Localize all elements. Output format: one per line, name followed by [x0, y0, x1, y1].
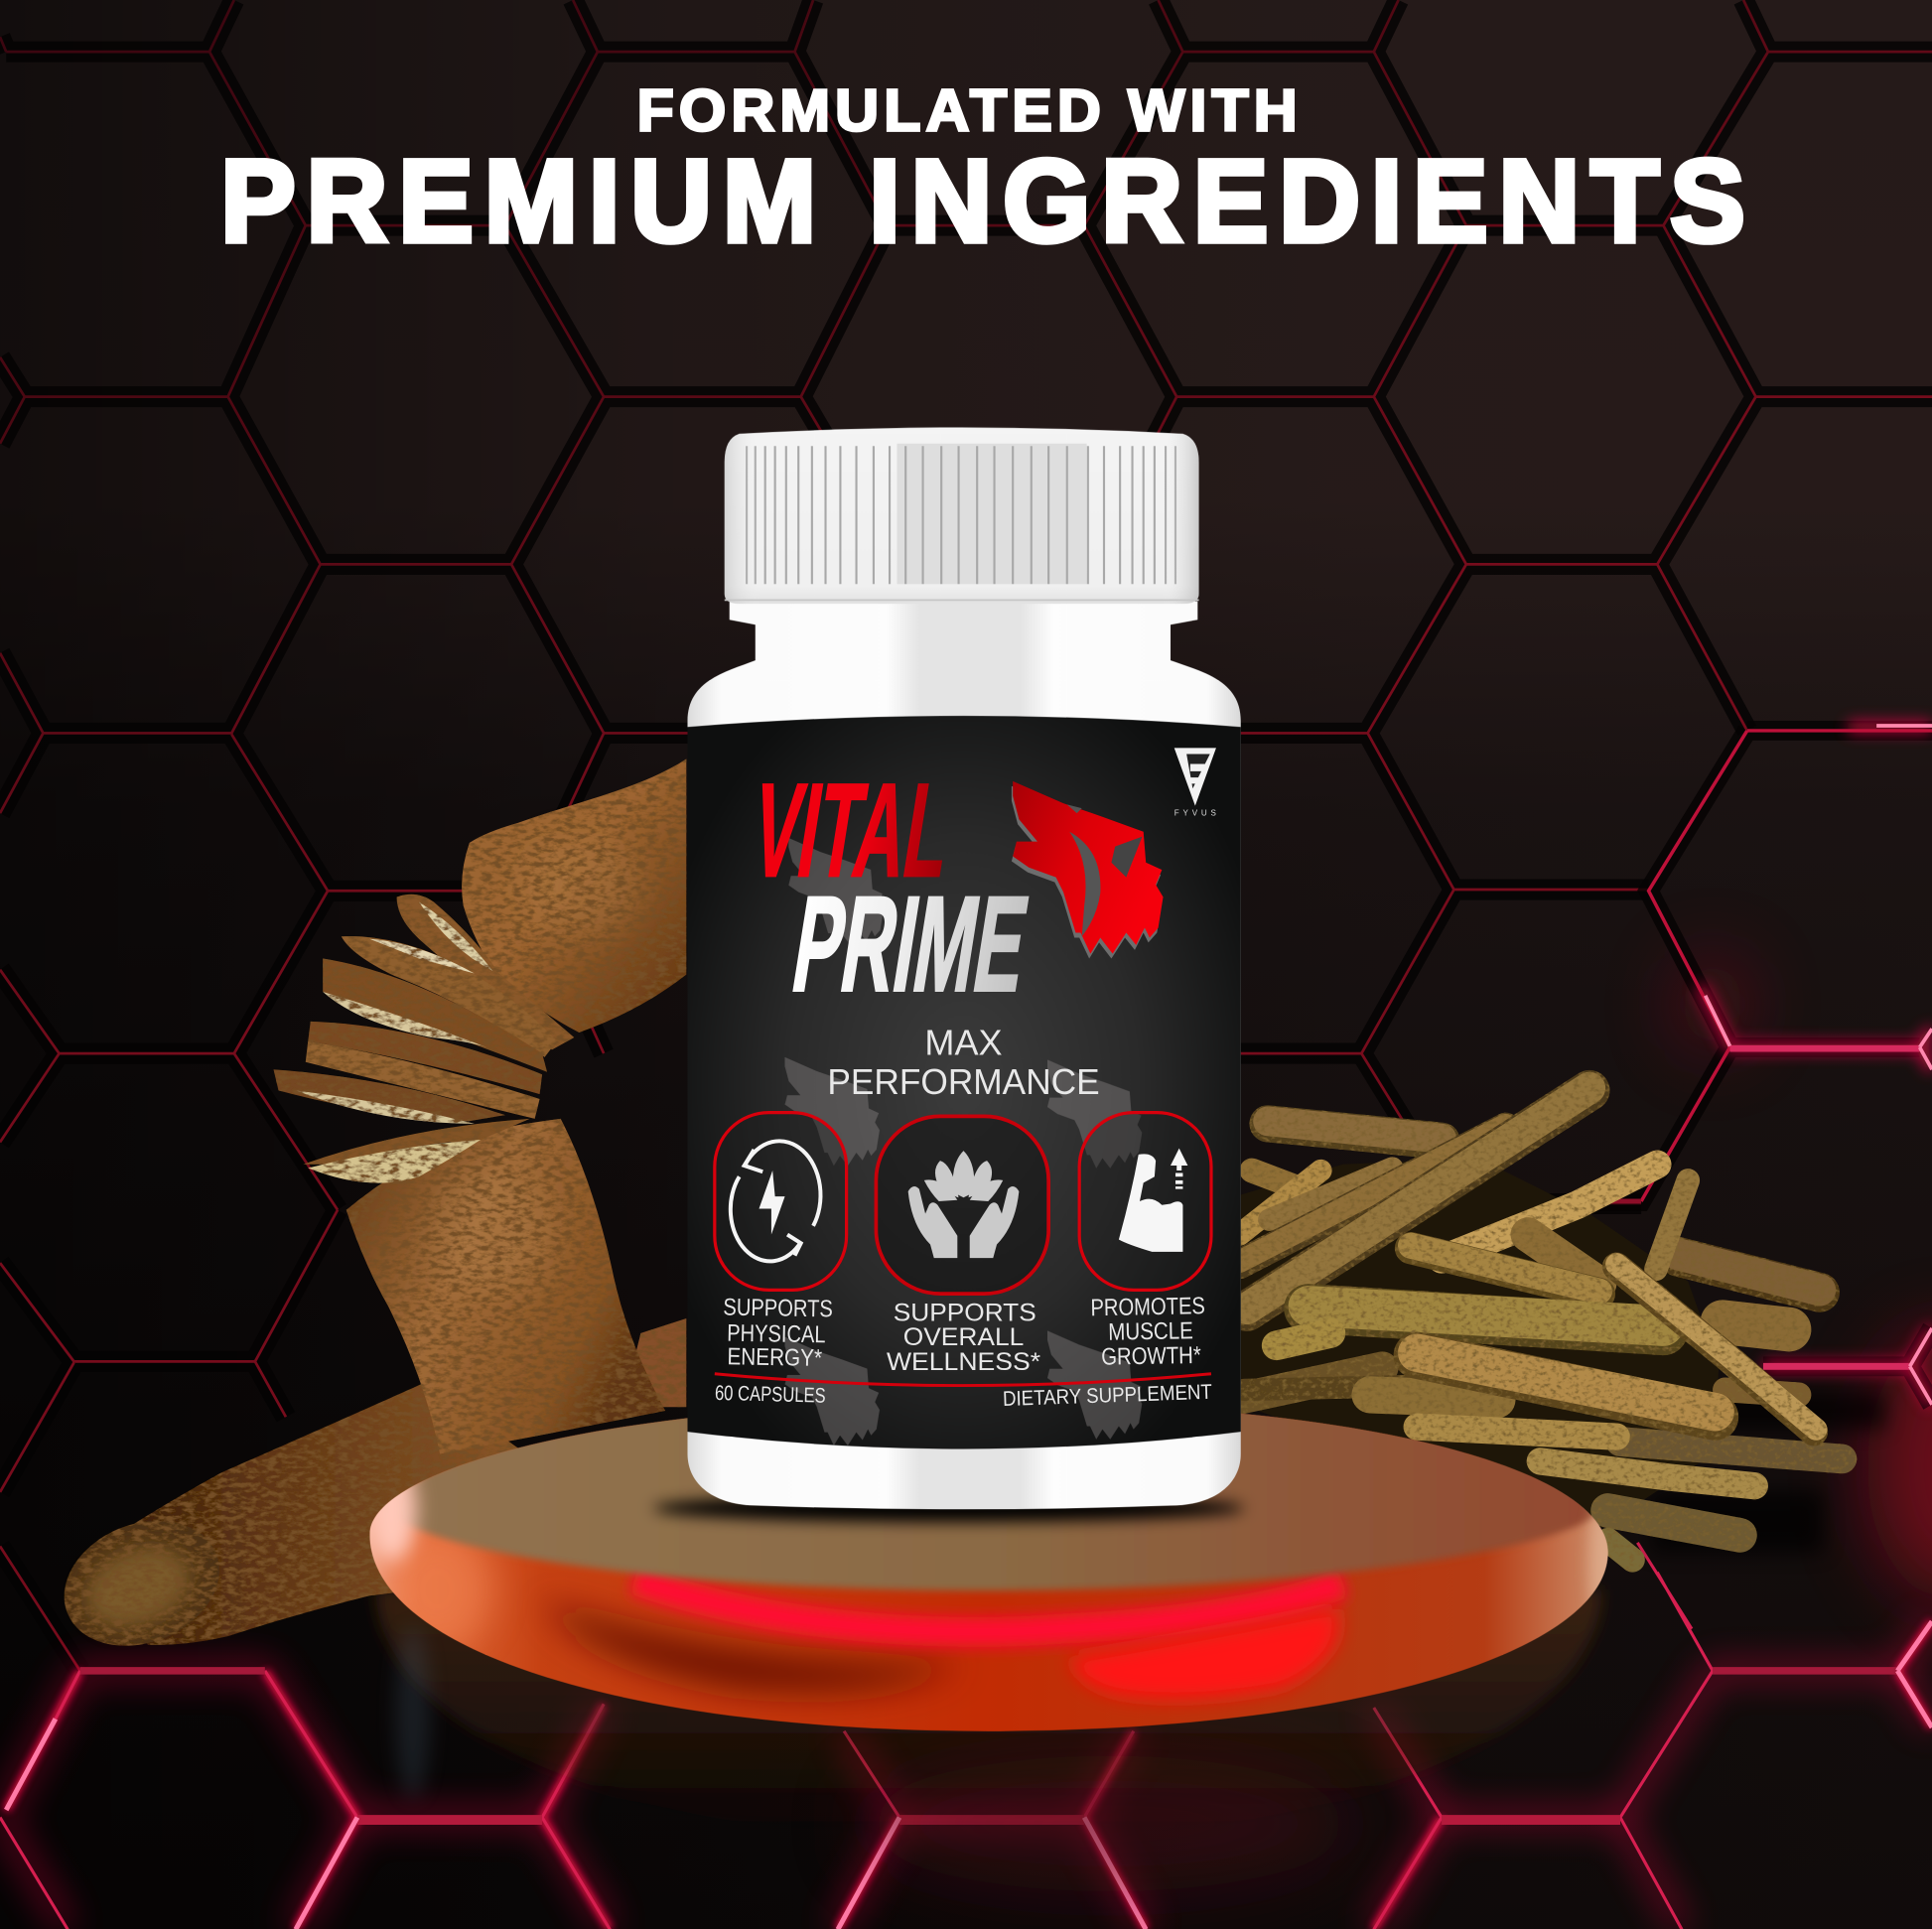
pile sticks — [1240, 1088, 1842, 1560]
ghost wolves — [785, 838, 1142, 1446]
benefit text: WELLNESS* — [887, 1349, 1040, 1376]
text: 60 capsules: 60 CAPSULES — [715, 1382, 826, 1408]
brand: VITAL: VITAL — [744, 756, 960, 904]
podium side — [369, 1402, 1608, 1731]
benefit text: GROWTH* — [1101, 1342, 1201, 1371]
benefit text: SUPPORTS — [894, 1300, 1036, 1326]
text: dietary supplement: DIETARY SUPPLEMENT — [1003, 1381, 1212, 1411]
icon: lotus and hands — [908, 1151, 1019, 1258]
icon: red wolf — [1012, 781, 1164, 959]
long root lying down — [46, 1318, 686, 1668]
icon: energy cycle — [731, 1141, 820, 1261]
front sticks — [1277, 1264, 1816, 1437]
floor reflection of podium — [376, 1589, 1601, 1891]
back sticks — [1240, 1121, 1842, 1560]
benefit text: MUSCLE — [1108, 1317, 1193, 1346]
ingredient: ashwagandha root pile — [1240, 1088, 1885, 1560]
bottle neck and body — [688, 602, 1241, 1509]
tagline: MAX PERFORMANCE: MAX — [924, 1022, 1003, 1062]
title line 1: FORMULATED WITH — [637, 77, 1303, 144]
label divider — [715, 1374, 1211, 1386]
upright cut chunk — [346, 1119, 665, 1453]
tagline: MAX PERFORMANCE: PERFORMANCE — [827, 1061, 1100, 1102]
hexagon grid: glowing right side lines — [1589, 726, 1932, 1405]
label — [688, 716, 1241, 1448]
benefit text: OVERALL — [903, 1324, 1024, 1351]
upper cut chunk — [462, 758, 686, 1033]
benefit text: PHYSICAL — [727, 1320, 826, 1348]
product bottle — [688, 428, 1241, 1509]
bottle cap — [725, 428, 1199, 604]
pile base shadow — [1240, 1159, 1719, 1528]
panel: wellness benefit — [876, 1116, 1048, 1376]
logo: FYVUS: FYVUS — [1174, 809, 1216, 818]
logo: FYVUS — [1174, 748, 1216, 818]
podium — [367, 1397, 1614, 1731]
benefit text: PROMOTES — [1090, 1293, 1205, 1321]
benefit text: ENERGY* — [727, 1343, 823, 1372]
panel: energy benefit — [715, 1113, 847, 1372]
main long sticks — [1240, 1088, 1657, 1390]
benefit text — [887, 1300, 1040, 1376]
title line 2: PREMIUM INGREDIENTS — [220, 135, 1756, 266]
podium surfaces — [367, 1397, 1614, 1699]
bottle cast shadow — [653, 1494, 1244, 1522]
pile shadow — [1601, 1392, 1885, 1553]
benefit text — [1090, 1293, 1206, 1371]
icon: flexed arm with arrow — [1119, 1149, 1187, 1252]
hexagon grid: bright pink floor lines — [0, 1543, 1932, 1929]
root slices — [274, 895, 574, 1183]
benefit text — [722, 1294, 833, 1372]
title — [220, 77, 1756, 266]
ingredient: cassava root — [46, 758, 686, 1668]
brand: PRIME: PRIME — [784, 870, 1036, 1021]
panel: muscle benefit — [1079, 1113, 1211, 1371]
benefit text: SUPPORTS — [723, 1294, 833, 1322]
tagline: MAX PERFORMANCE — [827, 1022, 1100, 1102]
